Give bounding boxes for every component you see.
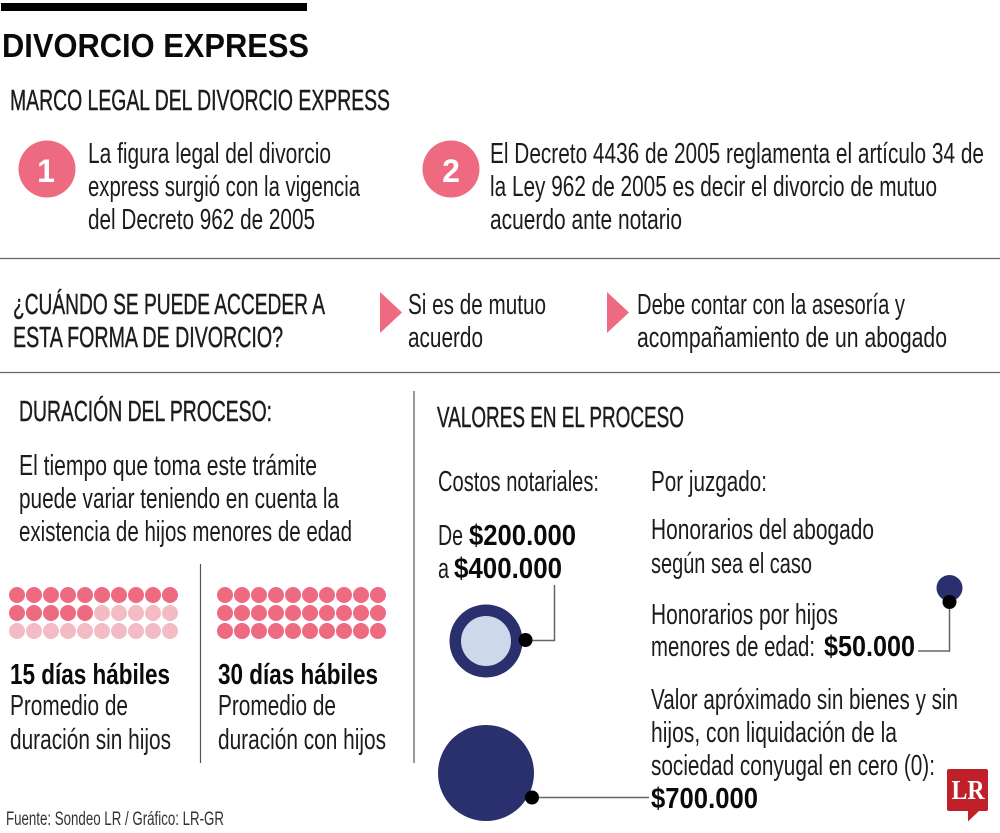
text block: por juzgado: según sea el caso (651, 548, 812, 580)
text block: honorarios por hijos: menores de edad: (651, 631, 815, 663)
panel: duracion del proceso (9, 395, 386, 763)
source: Fuente: Sondeo LR / Gráfico: LR-GR (6, 809, 224, 830)
dot chart: 15 dias (9, 587, 178, 639)
panel: marco legal (10, 85, 984, 236)
text block: 30 dias (218, 659, 386, 756)
icon: number 2 (422, 140, 480, 198)
arrow: condition 2 (607, 292, 629, 333)
icon: number 2: 2 (442, 153, 460, 189)
heading: marco legal: MARCO LEGAL DEL DIVORCIO EXPRESS (10, 85, 390, 117)
text block: duracion intro: puede variar teniendo en cuenta la (19, 483, 340, 515)
text block: 15 dias (10, 659, 171, 756)
text block: point 1: del Decreto 962 de 2005 (88, 204, 315, 236)
text block: 15 dias: Promedio de (10, 690, 128, 722)
text block: valor aproximado (651, 684, 958, 815)
title: DIVORCIO EXPRESS (2, 27, 309, 64)
heading: cuando acceder (13, 288, 325, 354)
text block: duracion intro: El tiempo que toma este trámite (19, 450, 317, 482)
text block: condition 1: Si es de mutuo (408, 289, 546, 321)
text block: condition 1: acuerdo (408, 322, 483, 354)
text block: costos notariales: $200.000 (469, 520, 576, 552)
text block: point 1: La figura legal del divorcio (88, 138, 331, 170)
heading: cuando acceder: ¿CUÁNDO SE PUEDE ACCEDER A (13, 288, 325, 321)
text block: 30 dias: Promedio de (218, 690, 336, 722)
text block: por juzgado (651, 466, 874, 580)
text block: condition 1 (408, 289, 546, 354)
text block: 30 dias: 30 días hábiles (218, 659, 378, 691)
text block: valor aproximado: $700.000 (651, 783, 758, 815)
text block: costos notariales: a (438, 553, 450, 585)
heading: duracion: DURACIÓN DEL PROCESO: (19, 395, 272, 428)
icon: number 1: 1 (37, 153, 55, 189)
logo: LR (947, 769, 988, 822)
bubble: costos notariales (450, 585, 554, 678)
text block: point 2 (490, 138, 984, 236)
text block: duracion intro: existencia de hijos menores de edad (19, 516, 352, 548)
text block: 15 dias: duración sin hijos (10, 724, 171, 756)
icon: number 1 (18, 140, 76, 198)
text block: por juzgado: Por juzgado: (651, 466, 767, 498)
text block: condition 2 (637, 289, 947, 354)
text block: point 2: acuerdo ante notario (490, 204, 682, 236)
text block: point 1 (88, 138, 361, 236)
logo: LR: LR (952, 775, 985, 805)
text block: costos notariales: $400.000 (454, 553, 562, 585)
top bar (1, 3, 307, 11)
text block: honorarios por hijos: Honorarios por hijos (651, 599, 838, 631)
text block: honorarios por hijos: $50.000 (824, 631, 915, 663)
text block: costos notariales: Costos notariales: (438, 466, 599, 498)
heading: valores: VALORES EN EL PROCESO (437, 402, 684, 434)
bubble: valor aproximado (438, 725, 649, 821)
panel: cuando acceder (13, 288, 947, 354)
arrow: condition 1 (380, 292, 402, 333)
dot chart: 30 dias (217, 587, 386, 639)
text block: 30 dias: duración con hijos (218, 724, 386, 756)
text block: costos notariales: De (438, 520, 463, 552)
panel: valores en el proceso (437, 402, 962, 821)
text block: 15 dias: 15 días hábiles (10, 659, 170, 691)
text block: honorarios por hijos (651, 599, 915, 663)
text block: costos notariales (438, 466, 599, 585)
text block: point 1: express surgió con la vigencia (88, 171, 361, 203)
bubble: honorarios por hijos (918, 575, 962, 651)
text block: valor aproximado: hijos, con liquidación de la (651, 717, 898, 749)
heading: cuando acceder: ESTA FORMA DE DIVORCIO? (13, 322, 283, 354)
text block: duracion intro (19, 450, 352, 548)
text block: por juzgado: Honorarios del abogado (651, 514, 874, 546)
